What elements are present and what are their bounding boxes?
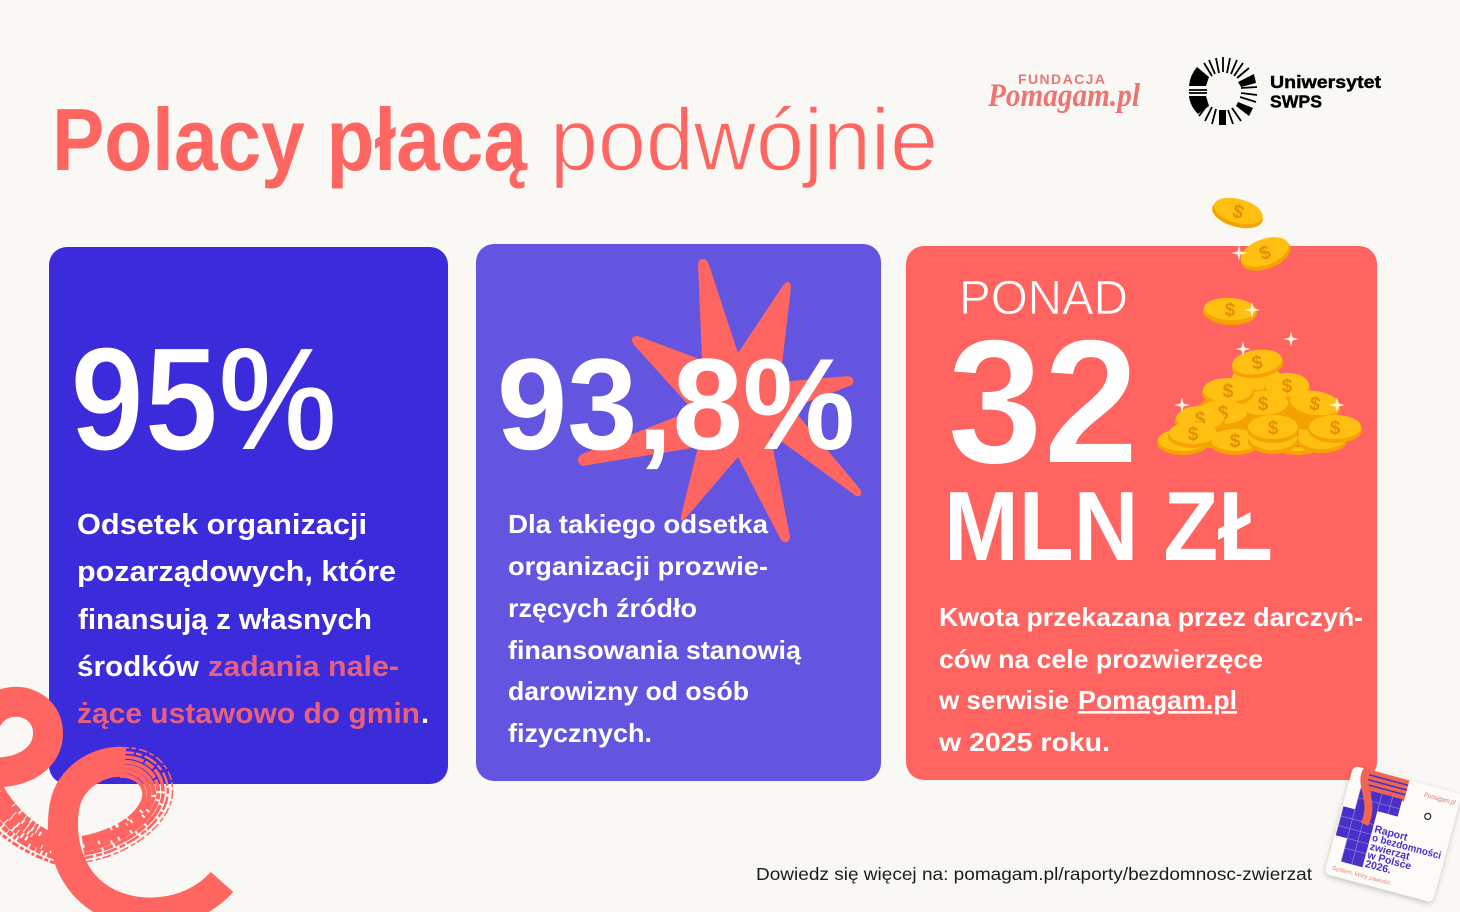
panel: 32 mln zł [906,246,1377,780]
cover partner mark [1424,813,1431,820]
icon: gold coins: $ [1230,431,1241,452]
brush swirls [0,702,222,912]
description: 93,8%: organizacji prozwie- [508,551,768,581]
logo: Fundacja Pomagam.pl: Pomagam.pl [987,78,1141,114]
description: 93,8%: rzęcych źródło [508,593,697,623]
icon: gold coins: $ [1282,376,1293,397]
icon: gold coins: $ [1218,403,1229,424]
title [52,90,938,189]
icon: gold coins: $ [1308,393,1322,416]
icon: gold coins: $ [1258,394,1269,415]
description: 32 mln zł: Pomagam.pl [1078,685,1237,715]
icon: gold coins: $ [1251,352,1264,375]
description: 95%: środków [77,651,199,683]
big unit MLN ZŁ: MLN ZŁ [944,471,1273,581]
icon: gold coins: $ [1268,418,1279,439]
label PONAD: PONAD [959,272,1128,325]
cover title: o bezdomności [1371,832,1443,862]
icon: gold coins: $ [1257,242,1274,265]
cover title: 2026. [1364,858,1392,876]
panel: 95% [49,247,448,784]
description: 95%: żące ustawowo do gmin [77,698,420,730]
description: 93,8%: fizycznych. [508,718,652,748]
logo: Uniwersytet SWPS [1189,57,1381,125]
panel: 93,8% [476,244,881,781]
icon: gold coins: $ [1230,201,1246,224]
starburst [578,259,861,542]
cover title: zwierząt [1368,841,1411,863]
logo: Uniwersytet SWPS: Uniwersytet [1270,72,1381,92]
cover title [1363,823,1445,888]
cover title: Raport [1373,823,1409,844]
description: 95%: finansują z własnych [78,604,372,636]
description: 93,8%: Dla takiego odsetka [508,509,769,539]
big number 32: 32 [947,302,1139,501]
icon: gold coins: $ [1188,424,1199,445]
icon: gold coins: $ [1195,409,1206,430]
icon: gold coins: $ [1293,431,1304,452]
description: 95% [77,509,429,730]
cover illustration [1330,766,1409,873]
title: podwójnie [550,90,938,189]
footer link text: Dowiedz się więcej na: pomagam.pl/raporty/bezdomnosc-zwierzat [756,864,1312,884]
icon: SWPS sunburst [1189,57,1257,125]
logo: Fundacja Pomagam.pl: FUNDACJA [1018,71,1105,87]
cover title: w Polsce [1365,849,1413,873]
description: 93,8%: finansowania stanowią [508,635,802,665]
icon: gold coins: $ [1224,300,1236,321]
description: 32 mln zł: w 2025 roku. [938,727,1110,757]
description: 95%: zadania nale- [208,651,399,683]
description: 93,8%: darowizny od osób [508,676,749,706]
description: 32 mln zł: w serwisie [938,685,1069,715]
big number 95%: 95% [70,317,337,482]
description: 32 mln zł [938,602,1363,757]
icon: gold coins: $ [1223,381,1234,402]
logo: Uniwersytet SWPS: SWPS [1270,92,1322,112]
description: 95%: Odsetek organizacji [77,509,367,541]
cover tagline: System, który zawodzi. [1331,865,1392,887]
description: 93,8% [508,509,802,748]
icon: gold coins [1157,193,1362,455]
big number 93,8%: 93,8% [497,331,855,477]
description: 32 mln zł: ców na cele prozwierzęce [939,644,1263,674]
report cover thumbnail [1324,765,1460,903]
icon: gold coins: $ [1330,418,1341,439]
description: 95%: . [421,698,429,730]
title: Polacy płacą [52,90,528,189]
description: 32 mln zł: Kwota przekazana przez darczyń- [939,602,1363,632]
description: 95%: pozarządowych, które [77,556,396,588]
